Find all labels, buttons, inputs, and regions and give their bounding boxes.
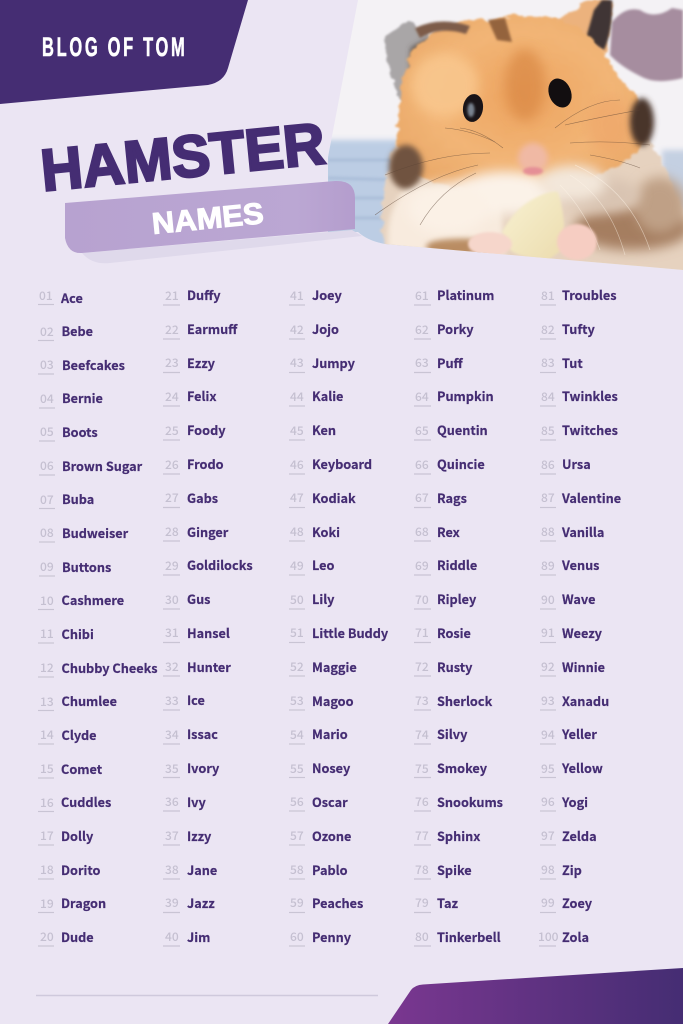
name column 5: 97 xyxy=(541,827,555,844)
name column 4: 70 xyxy=(415,591,429,608)
name column 2: 33 xyxy=(165,692,179,709)
name column 5: 90 xyxy=(541,591,555,608)
name column 1: Cashmere xyxy=(62,590,124,609)
name column 1: 03 xyxy=(40,356,54,373)
header banner xyxy=(0,0,248,104)
name column 2: 30 xyxy=(165,591,179,608)
name column 2: 29 xyxy=(165,557,179,574)
name column 4: 74 xyxy=(415,726,429,743)
name column 1: Cuddles xyxy=(61,792,111,811)
name column 2: 39 xyxy=(165,894,179,911)
name column 3: 58 xyxy=(290,861,304,878)
name column 4: 71 xyxy=(415,624,429,641)
name column 5: 81 xyxy=(541,287,555,304)
name column 1: Buttons xyxy=(62,557,111,576)
name column 1: 10 xyxy=(40,592,54,609)
name column 5: 83 xyxy=(541,354,555,371)
name column 3: Lily xyxy=(312,589,335,608)
name column 3: Ozone xyxy=(312,826,351,845)
name column 2: Issac xyxy=(187,724,218,743)
name column 1: 13 xyxy=(40,693,54,710)
name column 5: Twitches xyxy=(562,420,618,439)
name column 5: 94 xyxy=(541,726,555,743)
name column 3: Oscar xyxy=(312,792,348,811)
name column 4: Silvy xyxy=(437,724,468,743)
name column 5: Zola xyxy=(562,927,589,946)
name column 4: 72 xyxy=(415,658,429,675)
name column 3: Little Buddy xyxy=(312,623,389,642)
name column 1: 17 xyxy=(40,827,54,844)
name column 5: Zelda xyxy=(562,826,597,845)
name column 3: 47 xyxy=(290,489,304,506)
name column 1: 14 xyxy=(40,726,54,743)
name column 1: 12 xyxy=(40,659,54,676)
name column 5: Xanadu xyxy=(562,691,609,710)
name column 4: Quentin xyxy=(437,420,488,439)
name column 1: 04 xyxy=(40,390,54,407)
name column 4: 80 xyxy=(415,928,429,945)
name column 1: Ace xyxy=(60,288,83,307)
name column 1: 16 xyxy=(40,794,54,811)
name column 3: Maggie xyxy=(312,657,357,676)
name column 5 xyxy=(538,285,621,946)
name column 4: 65 xyxy=(415,422,429,439)
name column 4: Sphinx xyxy=(437,826,480,845)
name column 2: 40 xyxy=(165,928,179,945)
name column 5: 89 xyxy=(541,557,555,574)
name column 2: Gus xyxy=(187,589,210,608)
name column 5: 85 xyxy=(541,422,555,439)
name column 1: 19 xyxy=(40,895,54,912)
head xyxy=(398,16,648,196)
name column 3: 54 xyxy=(290,726,304,743)
name column 2: 25 xyxy=(165,422,179,439)
name column 1: 05 xyxy=(40,423,54,440)
name column 3: 45 xyxy=(290,422,304,439)
name column 3: Mario xyxy=(312,724,348,743)
name column 3: 50 xyxy=(290,591,304,608)
title ribbon xyxy=(65,181,355,253)
name column 1: Brown Sugar xyxy=(62,456,143,475)
name column 4: Pumpkin xyxy=(437,386,494,405)
name column 3: 42 xyxy=(290,321,304,338)
name column 5: 100 xyxy=(538,928,559,945)
name column 2: Ezzy xyxy=(187,353,216,372)
name column 5: Ursa xyxy=(562,454,591,473)
brand text: BLOG OF TOM xyxy=(42,32,185,62)
name column 1: Dude xyxy=(61,927,94,946)
name column 1: Boots xyxy=(62,422,98,441)
name column 2: Frodo xyxy=(187,454,224,473)
name column 5: 95 xyxy=(541,760,555,777)
eyes xyxy=(462,94,484,122)
name column 1: 18 xyxy=(40,861,54,878)
name column 1: 20 xyxy=(40,928,54,945)
name column 5: Yeller xyxy=(561,724,597,743)
name column 4: 79 xyxy=(415,894,429,911)
name column 3: 46 xyxy=(290,456,304,473)
name column 5: 99 xyxy=(541,894,555,911)
name column 4: 67 xyxy=(415,489,429,506)
name column 3: Magoo xyxy=(312,691,354,710)
name column 1: Buba xyxy=(62,489,94,508)
name column 2: Jazz xyxy=(187,893,215,912)
name column 2: Ivy xyxy=(187,792,206,811)
name column 5: Zoey xyxy=(562,893,593,912)
name column 4 xyxy=(414,285,503,946)
name column 1 xyxy=(38,287,158,946)
name column 2: Jane xyxy=(187,860,217,879)
name column 4: 76 xyxy=(415,793,429,810)
name column 4: Rags xyxy=(437,488,467,507)
title: hamster: HAMSTER xyxy=(38,110,328,204)
right ear xyxy=(555,0,612,52)
name column 2: 31 xyxy=(165,624,179,641)
name column 2 xyxy=(163,285,253,946)
name column 5: Venus xyxy=(561,555,599,574)
title: names: NAMES xyxy=(150,197,265,241)
name column 2: 36 xyxy=(165,793,179,810)
name column 5: Weezy xyxy=(562,623,603,642)
body xyxy=(379,138,683,270)
name column 4: Taz xyxy=(437,893,458,912)
name column 1: Comet xyxy=(61,759,103,778)
name column 3: Kodiak xyxy=(312,488,356,507)
title ribbon shadow xyxy=(82,230,362,263)
name column 4: Rosie xyxy=(437,623,471,642)
name column 3: 43 xyxy=(290,354,304,371)
name column 1: Budweiser xyxy=(62,523,129,542)
name column 4: 68 xyxy=(415,523,429,540)
name column 4: 73 xyxy=(415,692,429,709)
name column 3: 48 xyxy=(290,523,304,540)
name column 5: Wave xyxy=(562,589,596,608)
name column 3: Ken xyxy=(312,420,336,439)
name column 2: Hunter xyxy=(187,657,231,676)
name column 2: Ivory xyxy=(187,758,220,777)
name column 3: 59 xyxy=(290,894,304,911)
name column 2: 21 xyxy=(165,287,179,304)
name column 2: Ginger xyxy=(187,522,229,541)
name column 5: 86 xyxy=(541,456,555,473)
name column 5: 96 xyxy=(541,793,555,810)
name column 1: 11 xyxy=(40,625,54,642)
name column 4: 75 xyxy=(415,760,429,777)
name column 1: Bernie xyxy=(62,388,103,407)
name column 2: Goldilocks xyxy=(187,555,253,574)
name column 2: Izzy xyxy=(187,826,212,845)
name column 2: 38 xyxy=(165,861,179,878)
footer corner shape xyxy=(388,968,683,1024)
name column 3 xyxy=(289,285,389,946)
name column 4: 69 xyxy=(415,557,429,574)
name column 1: Beefcakes xyxy=(62,355,125,374)
name column 2: 26 xyxy=(165,456,179,473)
name column 1: 07 xyxy=(40,491,54,508)
name column 2: Foody xyxy=(187,420,226,439)
name column 5: 91 xyxy=(541,624,555,641)
name column 5: 84 xyxy=(541,388,555,405)
name column 1: 08 xyxy=(40,524,54,541)
name column 5: 88 xyxy=(541,523,555,540)
name column 4: Rusty xyxy=(437,657,473,676)
name column 5: Vanilla xyxy=(561,522,604,541)
name column 4: 62 xyxy=(415,321,429,338)
name column 5: Tut xyxy=(562,353,583,372)
name column 2: 22 xyxy=(165,321,179,338)
name column 1: Chibi xyxy=(62,624,94,643)
name column 3: 49 xyxy=(290,557,304,574)
name column 3: Nosey xyxy=(312,758,351,777)
nose xyxy=(518,143,548,173)
name column 4: Puff xyxy=(437,353,464,372)
name column 3: Peaches xyxy=(312,893,363,912)
name column 5: 92 xyxy=(541,658,555,675)
fur top markings xyxy=(415,21,470,38)
name column 3: 52 xyxy=(290,658,304,675)
name column 4: Tinkerbell xyxy=(437,927,501,946)
left ear xyxy=(386,25,436,106)
name column 3: Jojo xyxy=(312,319,339,338)
name column 4: 78 xyxy=(415,861,429,878)
whiskers xyxy=(375,100,650,225)
name column 2: 34 xyxy=(165,726,179,743)
name column 3: Leo xyxy=(312,555,335,574)
name column 3: 60 xyxy=(290,928,304,945)
name column 5: Valentine xyxy=(561,488,621,507)
name column 4: Spike xyxy=(437,860,472,879)
name column 2: 24 xyxy=(165,388,179,405)
name column 4: Platinum xyxy=(437,285,494,304)
name column 3: Kalie xyxy=(312,386,343,405)
name column 4: 63 xyxy=(415,354,429,371)
name column 3: Joey xyxy=(312,285,342,304)
name column 4: Snookums xyxy=(437,792,503,811)
name column 4: 66 xyxy=(415,456,429,473)
name column 3: Pablo xyxy=(312,860,348,879)
name column 4: Ripley xyxy=(437,589,477,608)
name column 2: 27 xyxy=(165,489,179,506)
name column 4: 61 xyxy=(415,287,429,304)
name column 1: 09 xyxy=(40,558,54,575)
white muzzle and chest xyxy=(453,171,557,215)
name column 4: Rex xyxy=(437,522,460,541)
name column 1: 02 xyxy=(40,323,54,340)
name column 3: 56 xyxy=(290,793,304,810)
name column 3: 51 xyxy=(290,624,304,641)
name column 4: Porky xyxy=(437,319,474,338)
name column 2: 37 xyxy=(165,827,179,844)
name column 2: Ice xyxy=(187,690,205,709)
hamster photo xyxy=(320,0,683,278)
name column 3: Koki xyxy=(312,522,340,541)
name column 2: 28 xyxy=(165,523,179,540)
name column 5: Tufty xyxy=(562,319,595,338)
name column 3: 55 xyxy=(290,760,304,777)
background purple blob xyxy=(610,8,683,81)
name column 2: Earmuff xyxy=(187,319,238,338)
name column 5: 93 xyxy=(541,692,555,709)
name column 3: 57 xyxy=(290,827,304,844)
name column 2: 32 xyxy=(165,658,179,675)
name column 2: Felix xyxy=(187,386,217,405)
name column 5: Twinkles xyxy=(562,386,618,405)
dark cheek patches xyxy=(389,145,423,189)
name column 4: Smokey xyxy=(437,758,488,777)
name column 3: Jumpy xyxy=(312,353,356,372)
name column 2: 23 xyxy=(165,354,179,371)
name column 1: Chumlee xyxy=(62,691,117,710)
name column 5: 82 xyxy=(541,321,555,338)
name column 1: 15 xyxy=(40,760,54,777)
name column 2: Jim xyxy=(187,927,210,946)
name column 3: 53 xyxy=(290,692,304,709)
name column 5: Troubles xyxy=(562,285,617,304)
name column 1: Dragon xyxy=(61,893,106,912)
name column 5: Yogi xyxy=(561,792,588,811)
name column 3: Penny xyxy=(312,927,352,946)
name column 4: 77 xyxy=(415,827,429,844)
name column 2: Duffy xyxy=(187,285,221,304)
name column 4: 64 xyxy=(415,388,429,405)
name column 2: 35 xyxy=(165,760,179,777)
name column 5: Yellow xyxy=(561,758,603,777)
name column 1: Bebe xyxy=(62,321,93,340)
name column 4: Sherlock xyxy=(437,691,493,710)
name column 4: Riddle xyxy=(437,555,477,574)
name column 5: 98 xyxy=(541,861,555,878)
name column 4: Quincie xyxy=(437,454,485,473)
name column 1: 01 xyxy=(39,287,53,304)
name column 1: Clyde xyxy=(62,725,97,744)
name column 5: Zip xyxy=(562,860,582,879)
name column 3: Keyboard xyxy=(312,454,372,473)
paws xyxy=(468,232,512,256)
name column 1: Dorito xyxy=(61,860,100,879)
name column 2: Gabs xyxy=(187,488,218,507)
name column 1: 06 xyxy=(40,457,54,474)
name column 3: 41 xyxy=(290,287,304,304)
seed xyxy=(502,192,564,260)
footer rule xyxy=(36,994,378,996)
name column 1: Chubby Cheeks xyxy=(62,658,158,677)
name column 3: 44 xyxy=(290,388,304,405)
name column 5: 87 xyxy=(541,489,555,506)
name column 1: Dolly xyxy=(61,826,94,845)
name column 2: Hansel xyxy=(187,623,230,642)
name column 5: Winnie xyxy=(562,657,605,676)
